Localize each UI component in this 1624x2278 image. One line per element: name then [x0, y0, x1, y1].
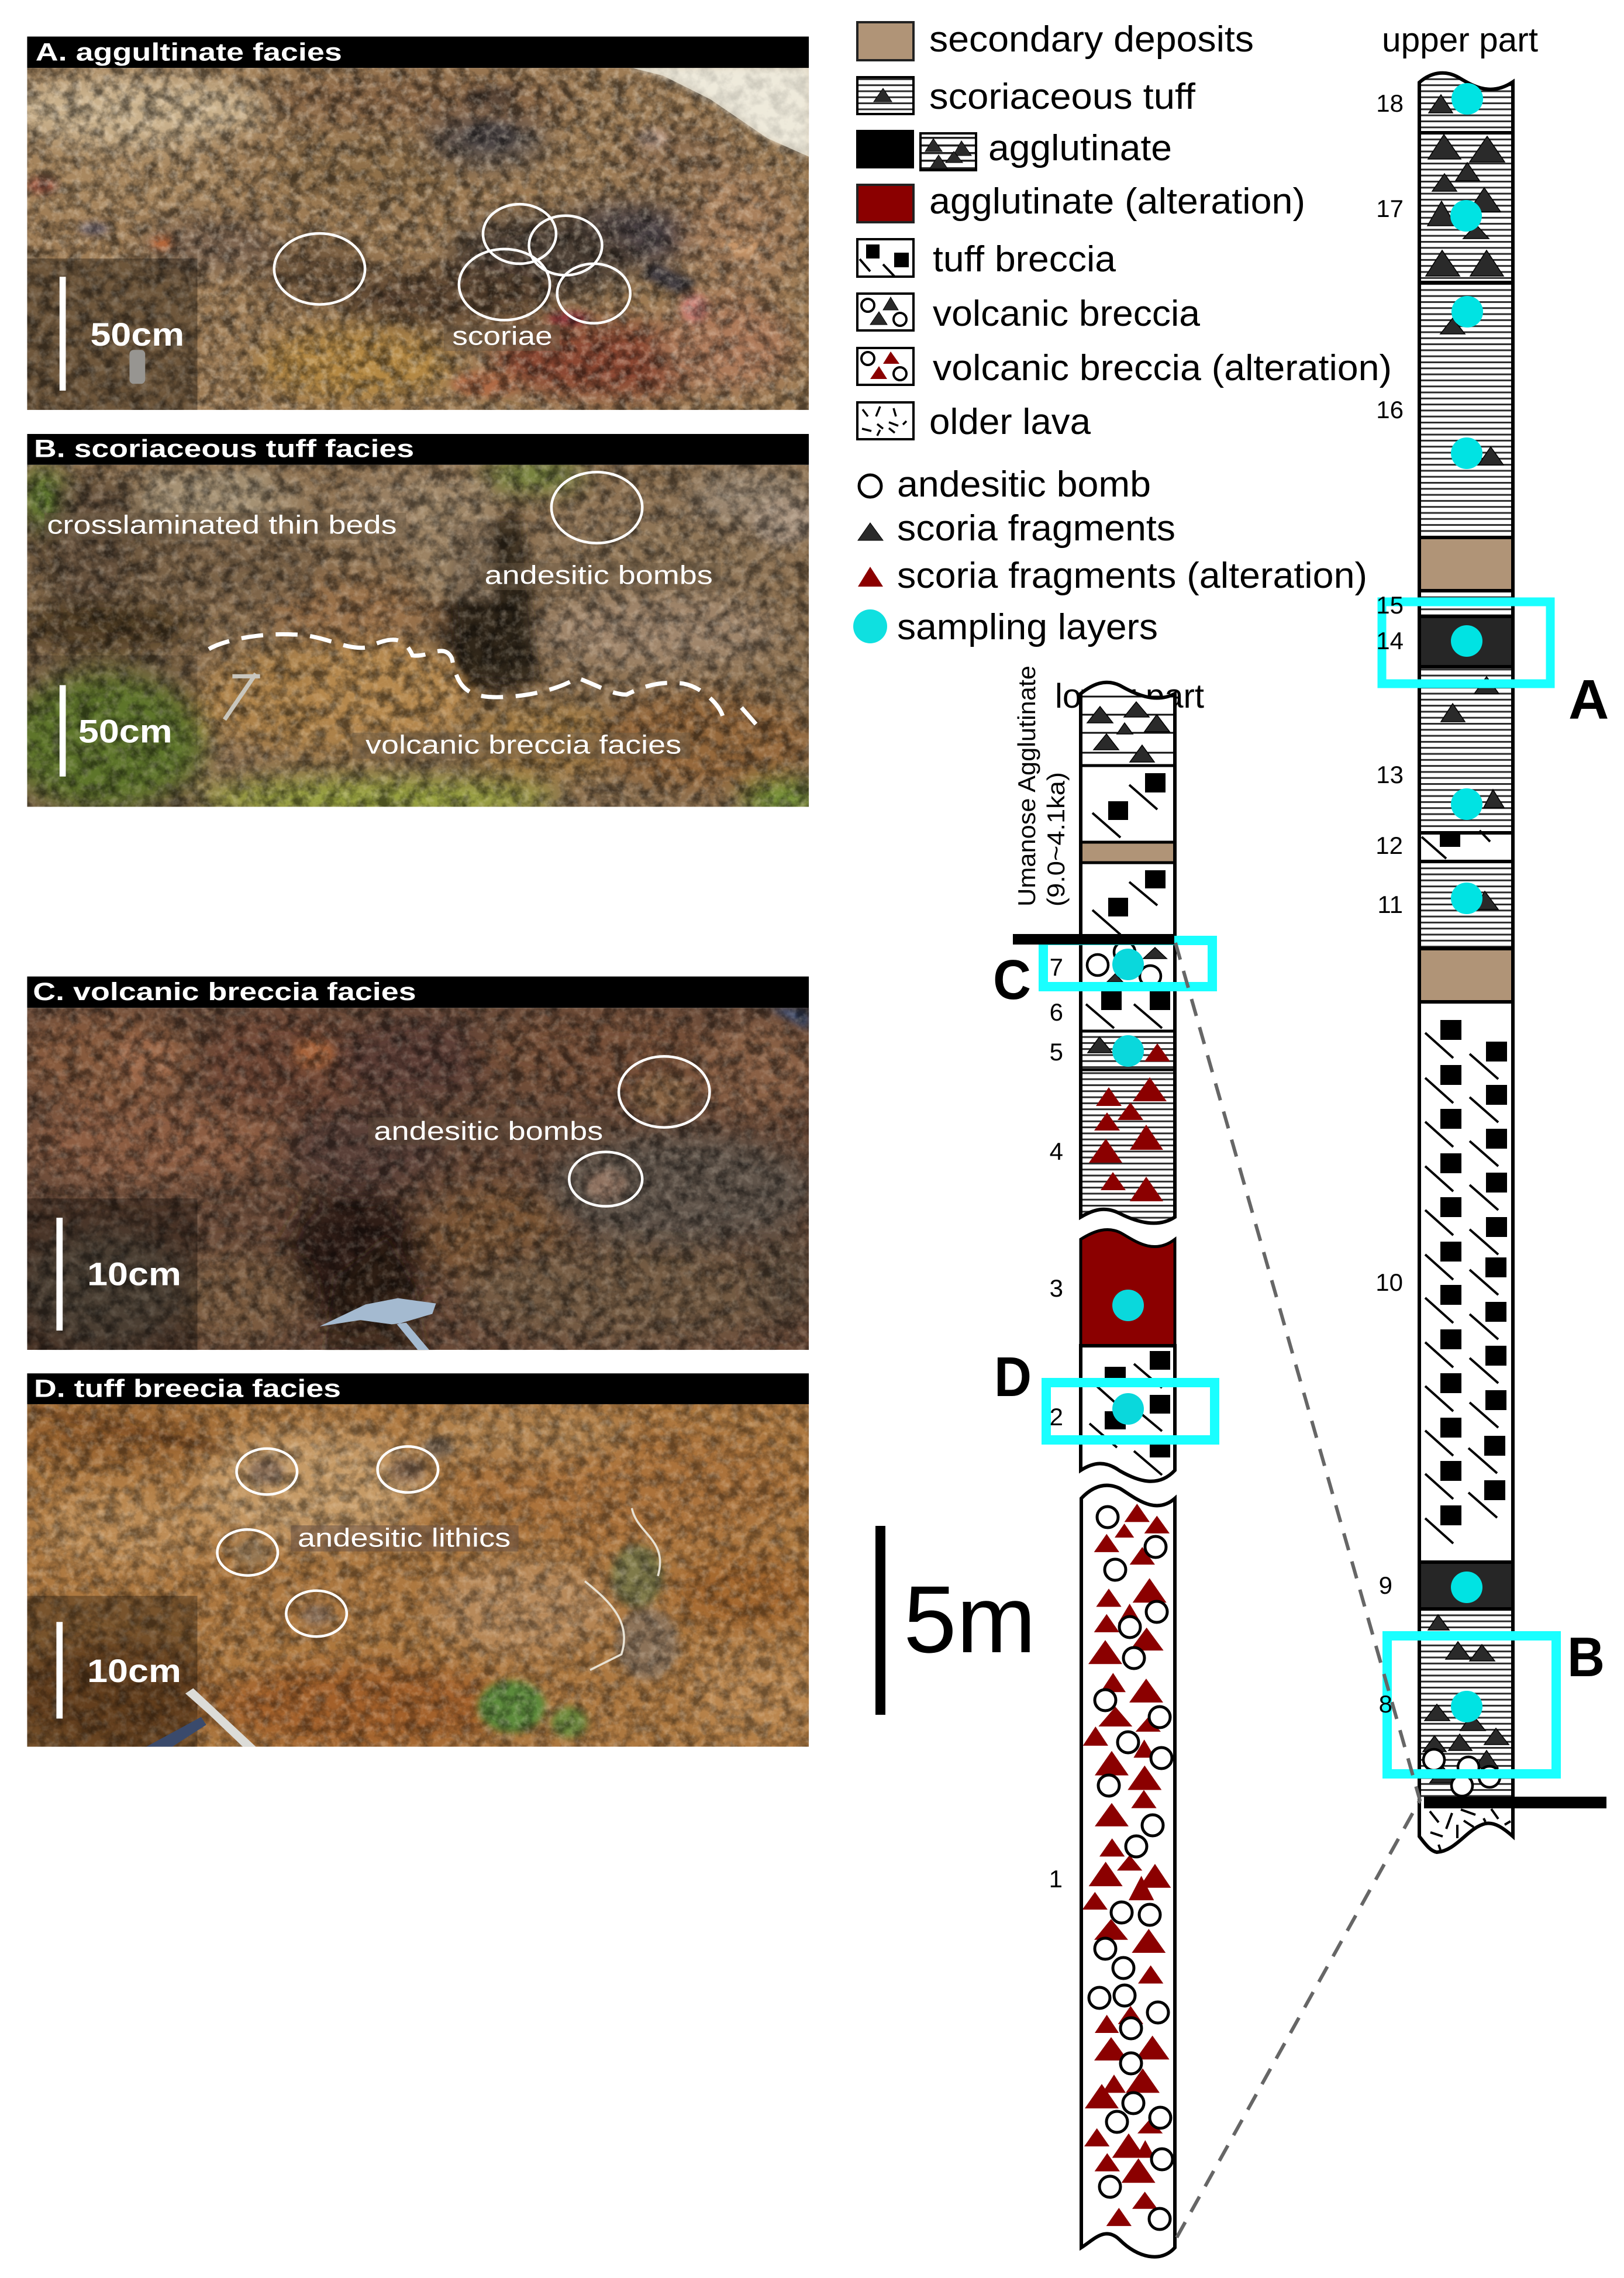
highlight box A [1382, 602, 1550, 684]
scale label B: 50cm [78, 714, 173, 750]
legend swatch: tuff breccia [857, 239, 913, 277]
scale bar B [60, 685, 66, 777]
tuff breccia, lower column layers [1086, 773, 1170, 1028]
legend swatch: agglutinate [856, 130, 976, 170]
sample tube [129, 350, 145, 384]
header D [27, 1373, 809, 1404]
dark scoria triangles, upper column [1423, 95, 1509, 1783]
column outline and boundaries [1419, 73, 1513, 1852]
layer numbers: 14 [1376, 627, 1404, 654]
header C: C. volcanic breccia facies [33, 978, 416, 1006]
vertical label: age: (9.0~4.1ka) [1042, 772, 1070, 907]
older lava dashes [1430, 1809, 1511, 1850]
sampling points, upper column [1450, 83, 1483, 1722]
upper base boundary line [1424, 1797, 1606, 1808]
scale box A [27, 259, 198, 410]
andesitic bombs, layer 1 [1089, 1507, 1173, 2229]
header B [27, 434, 809, 465]
legend swatch: scoriaceous tuff [857, 77, 913, 114]
layer numbers: 2 [1050, 1403, 1063, 1431]
scale box C [27, 1198, 198, 1350]
hammer C [319, 1298, 436, 1350]
layer numbers: 15 [1376, 591, 1404, 619]
panel D: tuff breccia facies [11, 1373, 825, 1748]
highlight box B [1387, 1636, 1556, 1774]
legend label: volcanic breccia alteration: volcanic breccia (alteration) [933, 348, 1392, 388]
photo B [5, 461, 825, 818]
scale box D [27, 1596, 198, 1747]
heading: upper part: upper part [1382, 21, 1538, 59]
photo key letters: A [1568, 668, 1609, 731]
photo key letters: D [994, 1346, 1032, 1408]
label: andesitic bombs C: andesitic bombs [374, 1117, 603, 1146]
andesitic bombs, layer 8 [1423, 1749, 1500, 1796]
label: scoriae: scoriae [452, 322, 553, 350]
scale label D: 10cm [87, 1653, 181, 1689]
legend swatch: secondary deposits [857, 22, 913, 60]
column fills [1419, 76, 1513, 1798]
scale label C: 10cm [87, 1256, 181, 1292]
photo key letters: B [1567, 1626, 1605, 1688]
layer numbers: 4 [1050, 1138, 1063, 1165]
label: volcanic breccia facies: volcanic breccia facies [366, 730, 681, 759]
scale bar 5m: 5m [904, 1566, 1036, 1673]
panel C: volcanic breccia facies [16, 977, 820, 1350]
layer numbers: 12 [1375, 832, 1403, 859]
legend symbol: scoria fragments alteration [858, 567, 883, 587]
andesitic bombs, layer 7 [1087, 942, 1161, 987]
scale box B [27, 656, 198, 807]
highlight box D [1046, 1383, 1215, 1440]
Umanose Agglutinate boundary line, lower [1013, 934, 1174, 945]
scale bar 5m [875, 1526, 1036, 1715]
layer 1 outline [1081, 1486, 1175, 2257]
layer 1 background [1081, 1486, 1175, 2257]
andesitic lithic circles [217, 1446, 438, 1636]
header B: B. scoriaceous tuff facies [34, 435, 414, 463]
header D: D. tuff breecia facies [34, 1374, 341, 1402]
scale bar C [56, 1218, 63, 1331]
legend swatch: older lava [857, 402, 913, 439]
legend label: agglutinate alteration: agglutinate (alteration) [929, 181, 1305, 222]
upper stratigraphic column [1419, 73, 1513, 1852]
legend label: agglutinate: agglutinate [988, 128, 1172, 168]
layer numbers [1049, 89, 1404, 1893]
legend label: older lava: older lava [929, 402, 1091, 442]
legend label: secondary deposits: secondary deposits [929, 19, 1254, 60]
lower stratigraphic column, upper segment [1081, 683, 1175, 1481]
tuff breccia, layer 10 [1425, 1020, 1507, 1543]
heading: lower part: lower part [1055, 677, 1204, 715]
legend [853, 19, 1392, 647]
altered agglutinate, layer 3 [1081, 1230, 1175, 1346]
panel A: agglutinate facies [0, 37, 809, 410]
legend label: scoria fragments alteration: scoria fragments (alteration) [897, 556, 1367, 596]
tuff breccia, layer 12 [1422, 830, 1490, 859]
photo panels [0, 37, 825, 1748]
layer numbers: 3 [1050, 1274, 1063, 1302]
legend label: andesitic bomb: andesitic bomb [897, 464, 1151, 505]
label: crosslaminated thin beds: crosslaminated thin beds [47, 511, 397, 540]
layer numbers: 18 [1376, 89, 1404, 117]
scale bar D [56, 1622, 63, 1718]
column outline and boundaries [1081, 683, 1175, 1223]
photo D [11, 1404, 825, 1748]
legend swatch: volcanic breccia [857, 294, 913, 330]
panel B: scoriaceous tuff facies [5, 434, 825, 818]
label: andesitic bombs B: andesitic bombs [485, 561, 713, 590]
layer fills [1081, 683, 1175, 1223]
layer numbers: 1 [1049, 1865, 1063, 1893]
hammer B [225, 674, 260, 719]
vertical label: Umanose Agglutinate: Umanose Agglutinate [1013, 666, 1040, 907]
scale bar A [60, 277, 66, 391]
legend symbol: scoria fragments [858, 523, 883, 540]
legend swatch: agglutinate alteration [857, 185, 913, 222]
legend label: scoriaceous tuff: scoriaceous tuff [929, 77, 1196, 117]
layer numbers: 13 [1376, 761, 1404, 788]
legend symbol: andesitic bomb [859, 475, 881, 497]
legend swatch: volcanic breccia alteration [857, 348, 913, 385]
lower column, layer 1 volcanic breccia [1081, 1486, 1175, 2257]
dark scoria triangles, lower column [1087, 702, 1170, 1053]
andesitic bomb circles C [569, 1056, 709, 1207]
hammer D [146, 1688, 256, 1747]
legend label: tuff breccia: tuff breccia [933, 239, 1116, 280]
layer numbers: 8 [1379, 1690, 1392, 1718]
red scoria triangles, layers 4-5 [1089, 1043, 1170, 1201]
andesitic bomb circle B [551, 472, 642, 543]
highlight box C [1043, 940, 1212, 987]
scoriae circles [274, 204, 630, 323]
legend label: scoria fragments: scoria fragments [897, 508, 1175, 549]
scale label A: 50cm [90, 316, 184, 353]
tuff breccia, layer 2 [1081, 1346, 1175, 1481]
layer numbers: 16 [1376, 396, 1404, 423]
layer numbers: 11 [1377, 891, 1403, 918]
photo key letters: C [993, 949, 1031, 1011]
correlation dashed lines [1175, 943, 1420, 2238]
layer numbers: 17 [1376, 195, 1404, 222]
red scoria triangles, layer 1 [1082, 1504, 1171, 2226]
facies boundary dashed line [209, 634, 760, 729]
photo key letters [993, 668, 1609, 1688]
legend symbol: sampling layers [853, 609, 887, 643]
layer numbers: 6 [1050, 998, 1063, 1026]
header A: A. aggultinate facies [36, 39, 342, 67]
legend label: volcanic breccia: volcanic breccia [933, 294, 1201, 334]
layer numbers: 7 [1050, 953, 1063, 981]
label: andesitic lithics: andesitic lithics [298, 1524, 511, 1553]
layer numbers: 10 [1375, 1269, 1403, 1296]
header A [27, 37, 809, 68]
sampling points, lower column [1112, 949, 1144, 1425]
layer numbers: 5 [1050, 1038, 1063, 1066]
photo C [16, 1008, 820, 1350]
layer numbers: 9 [1379, 1571, 1392, 1599]
header C [27, 977, 809, 1008]
legend label: sampling layers: sampling layers [897, 607, 1158, 647]
photo A [0, 68, 809, 410]
